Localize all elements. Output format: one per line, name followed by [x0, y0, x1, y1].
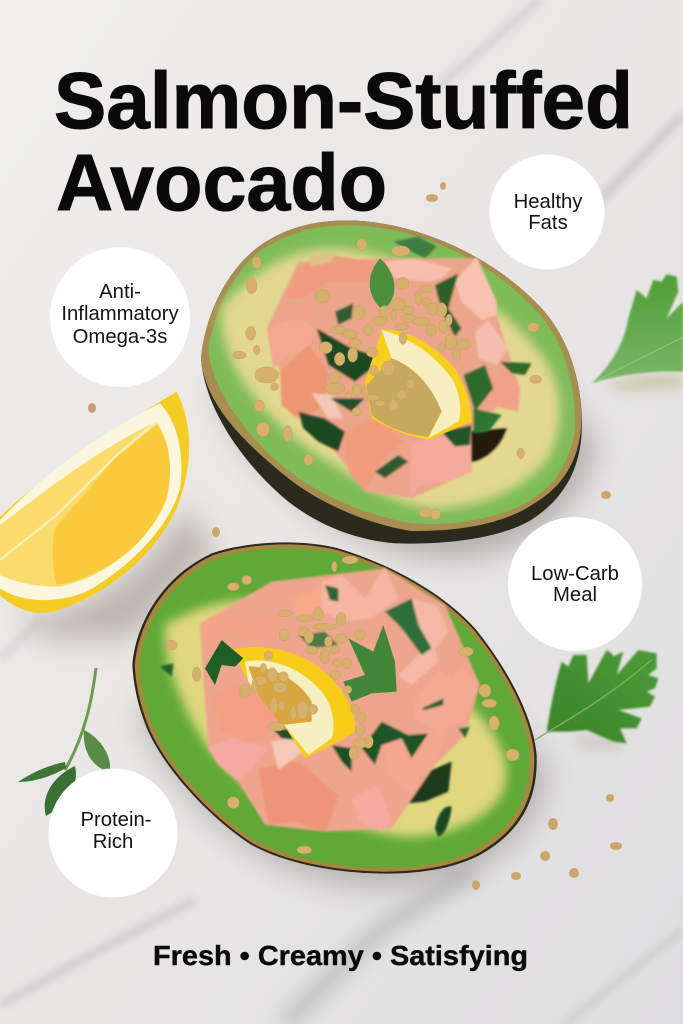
- herbs: [298, 412, 345, 452]
- badge: Healthy Fats: [490, 154, 604, 270]
- badge: Protein-Rich: Protein-: [80, 809, 152, 831]
- tagline: Fresh • Creamy • Satisfying: [153, 940, 528, 971]
- parsley: top right: [592, 274, 683, 390]
- badge: Healthy Fats: Fats: [528, 212, 568, 234]
- loose sesame seeds: [88, 182, 622, 890]
- parsley: bottom right: [535, 650, 658, 750]
- avocado skin: [201, 221, 582, 544]
- avocado yellow centre: [165, 600, 506, 837]
- lemon slice: [232, 647, 355, 758]
- herbs: [385, 598, 432, 655]
- herb leaf: [343, 625, 397, 702]
- sesame seeds: [233, 238, 542, 520]
- lemon wedge: [0, 392, 213, 638]
- avocado pit hollow: [455, 428, 507, 463]
- badge: Protein-Rich: [48, 768, 178, 898]
- badge: Low-Carb Meal: [508, 517, 642, 651]
- title: [54, 56, 633, 227]
- parsley sprig: left: [18, 668, 110, 816]
- badge: Anti-Inflammatory Omega-3s: Omega-3s: [73, 326, 167, 348]
- salmon filling: [160, 567, 480, 837]
- badge: Protein-Rich: Rich: [93, 831, 133, 853]
- salmon filling: [267, 237, 532, 498]
- herb cluster: [205, 640, 243, 685]
- title: Avocado: [56, 138, 387, 227]
- avocado rim: [135, 544, 534, 872]
- lemon slice: [365, 330, 472, 440]
- badge: Anti-Inflammatory Omega-3s: [50, 247, 190, 387]
- top avocado: [201, 221, 595, 558]
- bottom avocado: [132, 542, 548, 888]
- badge: Anti-Inflammatory Omega-3s: Inflammatory: [61, 303, 179, 325]
- avocado rim: [201, 221, 581, 531]
- badge: Low-Carb Meal: Low-Carb: [531, 563, 619, 585]
- sesame seeds: [166, 556, 519, 854]
- badge: Healthy Fats: Healthy: [514, 191, 583, 213]
- herb leaf: [370, 258, 394, 310]
- avocado flesh: [139, 548, 530, 868]
- badge: Low-Carb Meal: Meal: [553, 584, 597, 606]
- avocado yellow centre: [221, 249, 560, 509]
- avocado flesh: [208, 225, 575, 524]
- avocado skin: [132, 542, 537, 874]
- title: Salmon-Stuffed: [54, 56, 633, 145]
- badge: Anti-Inflammatory Omega-3s: Anti-: [99, 281, 141, 303]
